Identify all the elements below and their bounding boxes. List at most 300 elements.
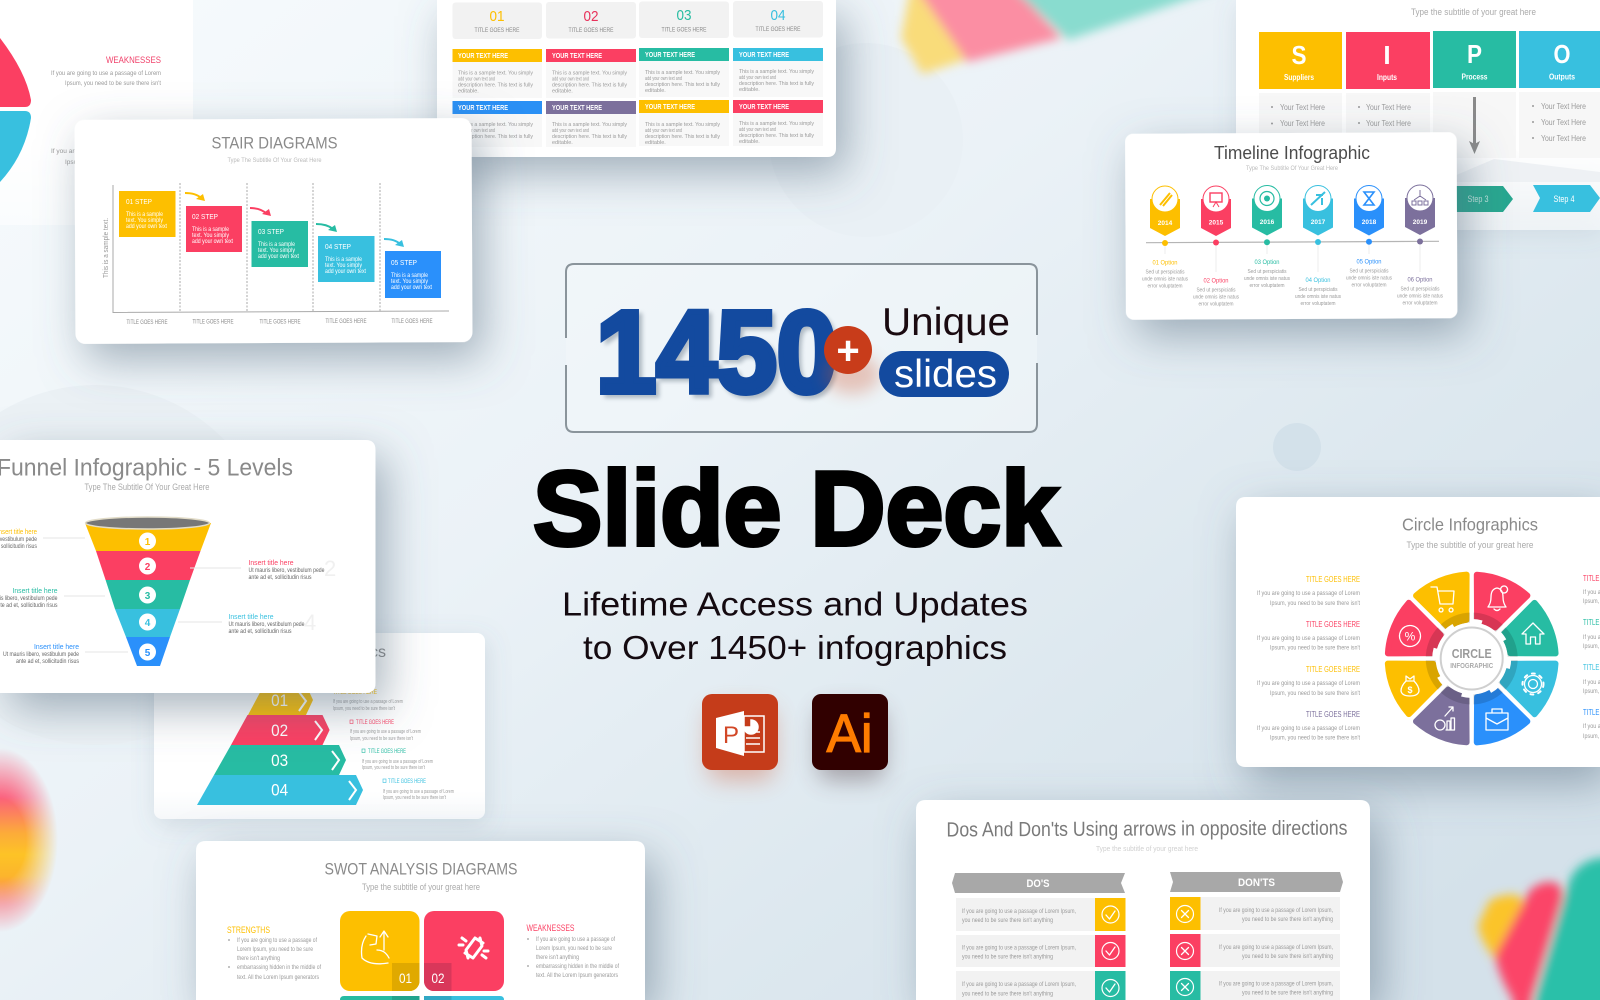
pyramid text blocks: TITLE GOES HERE	[388, 779, 426, 785]
timeline labels: unde omnis iste natus	[1346, 276, 1392, 282]
SIPOC tiles: P	[1467, 39, 1482, 69]
pin 2018: 2018	[1362, 219, 1377, 226]
icon: cart	[1431, 587, 1454, 612]
table body text: editable.	[739, 139, 760, 145]
circle left text: TITLE GOES HERE	[1306, 620, 1360, 629]
table body text: editable.	[458, 88, 479, 94]
table header bars: YOUR TEXT HERE	[645, 104, 695, 111]
circle subtitle: Type the subtitle of your great here	[1406, 540, 1534, 550]
icon: briefcase	[1486, 709, 1508, 730]
table body text: editable.	[645, 140, 666, 146]
pyramid layer 4	[197, 775, 363, 805]
funnel connectors	[43, 538, 241, 652]
decorative arc: left	[0, 385, 275, 745]
don't row 1: If you are going to use a passage of Lorem Ipsum,	[1219, 907, 1333, 914]
numbered title boxes: TITLE GOES HERE	[474, 28, 520, 34]
table header bars: YOUR TEXT HERE	[552, 105, 602, 112]
funnel label 3: Insert title here	[12, 586, 58, 595]
pyramid layer 3	[214, 745, 346, 775]
funnel label 5: ante ad et, sollicitudin risus	[16, 658, 80, 665]
SIPOC bullet text: Your Text Here	[1366, 102, 1411, 112]
step 1: text. You simply	[126, 218, 163, 224]
arrow: process down	[1469, 97, 1480, 154]
timeline labels	[1142, 258, 1443, 308]
timeline labels: error voluptatem	[1300, 301, 1336, 307]
strengths text: embarrassing hidden in the middle of	[237, 964, 321, 971]
SIPOC bullet text: Your Text Here	[1541, 101, 1586, 111]
wedge under SIPOC columns	[1440, 159, 1600, 182]
SWOT tile: strengths	[340, 911, 420, 991]
panel: timeline infographic	[1125, 132, 1457, 320]
timeline labels: error voluptatem	[1402, 300, 1438, 306]
icon: percent badge: %	[1405, 630, 1416, 644]
don't row 3	[1170, 971, 1340, 1000]
table body text: add your own text and	[552, 76, 589, 82]
pyramid text blocks: Ipsum, you need to be sure there isn't	[333, 706, 395, 712]
don't row 2	[1170, 934, 1340, 967]
circle left text: If you are going to use a passage of Lorem	[1257, 680, 1360, 687]
pin 2019	[1405, 185, 1435, 244]
weaknesses text: there isn't anything	[536, 954, 579, 961]
timeline labels: unde omnis iste natus	[1193, 294, 1239, 300]
subheading	[562, 586, 1028, 666]
weaknesses text: Lorem Ipsum, you need to be sure	[536, 945, 612, 952]
table header bars: YOUR TEXT HERE	[739, 52, 789, 59]
pyramid text blocks: If you are going to use a passage of Lorem	[362, 759, 433, 765]
table header bars: YOUR TEXT HERE	[458, 105, 508, 112]
stair axes	[113, 183, 449, 312]
table body text: add your own text and	[458, 128, 495, 134]
funnel graphic: 3	[145, 591, 151, 602]
y-axis label: This is a sample text.	[103, 218, 110, 278]
circle title: Circle Infographics	[1402, 514, 1538, 534]
pin 2016: 2016	[1260, 219, 1275, 226]
numbered title boxes: 01	[490, 8, 504, 25]
panel: funnel infographic	[0, 440, 376, 693]
pyramid text blocks: TITLE GOES HERE	[333, 690, 377, 696]
x-axis labels: TITLE GOES HERE	[192, 318, 234, 326]
panel: weaknesses slide fragment	[0, 0, 193, 225]
circle left text: Ipsum, you need to be sure there isn't	[1270, 644, 1360, 652]
x-axis labels: TITLE GOES HERE	[126, 319, 168, 326]
numbered title boxes: 03	[676, 7, 692, 24]
SIPOC bullet text: Your Text Here	[1366, 118, 1411, 128]
table header bars	[452, 48, 823, 114]
table header bars: YOUR TEXT HERE	[645, 52, 695, 59]
funnel label 2: Ut mauris libero, vestibulum pede	[248, 567, 325, 574]
table body text: This is a sample text. You simply	[739, 121, 814, 127]
step 2: text. You simply	[192, 233, 229, 239]
weaknesses text: WEAKNESSES	[526, 923, 574, 933]
timeline labels: 03 Option	[1254, 259, 1280, 266]
pyramid text blocks: If you are going to use a passage of Lorem	[333, 699, 403, 705]
SIPOC tiles: Suppliers	[1284, 73, 1314, 82]
funnel graphic	[85, 517, 211, 666]
SIPOC column backgrounds	[1259, 92, 1600, 158]
step 3	[252, 221, 308, 267]
subheading: Lifetime Access and Updates	[562, 586, 1028, 622]
pin 2014: 2014	[1158, 220, 1173, 227]
SIPOC tiles: Process	[1462, 72, 1488, 82]
numbered title boxes: 02	[584, 8, 598, 25]
pie chart fragment	[0, 38, 31, 182]
pyramid text blocks: Ipsum, you need to be sure there isn't	[383, 795, 446, 801]
step 2: 02 STEP	[192, 212, 218, 221]
table header bars: YOUR TEXT HERE	[739, 104, 789, 111]
step 5: add your own text	[391, 285, 432, 291]
main heading: Slide Deck	[533, 450, 1060, 568]
text: weaknesses body: If you are going to use a passage of Lorem	[51, 70, 161, 77]
pyramid layer 2	[231, 715, 330, 745]
circle left text: Ipsum, you need to be sure there isn't	[1270, 690, 1360, 697]
table body text: add your own text and	[645, 128, 682, 134]
SIPOC bullet text	[1271, 101, 1586, 143]
stair title: STAIR DIAGRAMS	[212, 134, 338, 152]
timeline labels: 04 Option	[1306, 277, 1331, 284]
timeline labels: unde omnis iste natus	[1397, 294, 1443, 300]
weaknesses text: text. All the Lorem Ipsum generators	[536, 972, 619, 979]
funnel label 3	[0, 586, 58, 609]
numbered title boxes: TITLE GOES HERE	[756, 27, 800, 33]
timeline labels: error voluptatem	[1148, 284, 1183, 290]
funnel graphic: 1	[145, 537, 151, 548]
table body text: description here. This text is fully	[552, 134, 627, 140]
strengths text	[227, 925, 321, 981]
circle left text: Ipsum, you need to be sure there isn't	[1270, 600, 1360, 607]
text: unique: Unique	[882, 301, 1010, 344]
number shadow: 1450	[600, 290, 840, 420]
table body text: This is a sample text. You simply	[458, 70, 533, 76]
text: weaknesses body: If you are	[51, 148, 78, 155]
timeline labels: 01 Option	[1152, 260, 1178, 266]
SIPOC bullet text: Your Text Here	[1280, 118, 1325, 128]
decorative circle: top center	[769, 43, 963, 237]
step 4: This is a sample	[325, 257, 363, 263]
step 5: 05 STEP	[391, 258, 417, 267]
SWOT tile: strengths: 01	[399, 970, 412, 986]
funnel graphic: 5	[145, 648, 151, 659]
step 2: This is a sample	[192, 227, 230, 233]
step 3: text. You simply	[258, 248, 295, 254]
icon: PowerPoint: P	[723, 722, 739, 749]
table body text: add your own text and	[458, 76, 495, 82]
banner: do's: DO'S	[1026, 878, 1050, 890]
do row 1: If you are going to use a passage of Lorem Ipsum,	[962, 908, 1076, 915]
strengths text: Lorem Ipsum, you need to be sure	[237, 946, 313, 953]
pyramid title: Pyramid Infographics	[236, 644, 386, 661]
funnel label 2: 2	[324, 556, 336, 581]
pyramid text blocks: TITLE GOES HERE	[368, 749, 406, 755]
timeline labels: Sed ut perspiciatis	[1146, 270, 1185, 276]
step 4	[318, 236, 374, 282]
icon: growth chart	[1435, 707, 1454, 730]
step 1: 01 STEP	[126, 197, 152, 206]
table body text: editable.	[552, 88, 573, 94]
timeline labels: Sed ut perspiciatis	[1298, 287, 1338, 293]
table body text: This is a sample text. You simply	[458, 122, 533, 128]
blurred shape: left	[0, 750, 56, 930]
timeline connectors	[1165, 243, 1420, 272]
banner: don'ts: DON'TS	[1238, 877, 1275, 889]
timeline labels: 05 Option	[1356, 258, 1382, 266]
don't row 3: you need to be sure there isn't anything	[1242, 990, 1333, 996]
step 2: add your own text	[192, 239, 233, 245]
timeline subtitle: Type The Subtitle Of Your Great Here	[1246, 166, 1339, 172]
funnel label 2: ante ad et, sollicitudin risus	[248, 574, 312, 581]
panel: circle infographics	[1236, 497, 1600, 767]
pin 2019: 2019	[1413, 219, 1428, 226]
circle right text	[1583, 574, 1600, 740]
strengths text: there isn't anything	[237, 955, 280, 962]
blurred shapes: bottom right	[1448, 828, 1600, 1000]
funnel graphic: 2	[145, 562, 151, 573]
table body text: This is a sample text. You simply	[645, 122, 720, 128]
step 3: 03 STEP	[258, 227, 284, 236]
stair arrows	[185, 193, 404, 247]
do row 3	[956, 971, 1126, 1000]
strengths text: STRENGTHS	[227, 925, 270, 935]
pyramid layer 1	[248, 685, 313, 715]
decorative circle: small right	[1273, 423, 1321, 471]
blurred shapes: top center	[901, 0, 1245, 74]
table row bodies	[452, 61, 823, 147]
SWOT subtitle: Type the subtitle of your great here	[362, 882, 480, 892]
pyramid layer 1: 01	[271, 691, 288, 710]
do row 2: If you are going to use a passage of Lorem Ipsum,	[962, 944, 1076, 952]
badge: 1450+ unique slides	[566, 264, 1037, 432]
SIPOC tiles: Outputs	[1549, 72, 1575, 82]
funnel label 4: ante ad et, sollicitudin risus	[228, 628, 292, 635]
icon: Illustrator	[812, 694, 888, 780]
text: weaknesses body: Ipsum	[65, 159, 83, 166]
SIPOC tiles	[1259, 31, 1600, 89]
table body text: description here. This text is fully	[739, 133, 814, 139]
funnel title: Funnel Infographic - 5 Levels	[0, 454, 293, 482]
timeline labels: 06 Option	[1408, 276, 1433, 284]
step 2	[186, 206, 242, 252]
step 3 arrow	[1440, 186, 1513, 212]
SWOT tile: weaknesses: 02	[432, 970, 445, 986]
icon: percent badge	[1400, 626, 1420, 646]
pin 2017	[1303, 186, 1333, 245]
circle left text: TITLE GOES HERE	[1306, 710, 1360, 719]
funnel label 5: Ut mauris libero, vestibulum pede	[3, 651, 79, 658]
timeline labels: Sed ut perspiciatis	[1196, 288, 1236, 294]
pin 2015	[1201, 186, 1231, 246]
step 3: This is a sample	[258, 242, 296, 248]
pyramid layer 4: 04	[271, 780, 288, 800]
table body text: editable.	[552, 140, 573, 146]
SWOT title: SWOT ANALYSIS DIAGRAMS	[324, 860, 518, 878]
numbered title boxes: TITLE GOES HERE	[568, 28, 614, 34]
icon: gear	[1522, 674, 1544, 694]
dos subtitle: Type the subtitle of your great here	[1096, 846, 1198, 853]
panel: dos and don'ts	[916, 800, 1370, 1000]
circle left text: If you are going to use a passage of Lorem	[1257, 590, 1360, 597]
table body text: This is a sample text. You simply	[645, 70, 720, 76]
text: weaknesses body	[51, 70, 161, 166]
don't row 3: If you are going to use a passage of Lorem Ipsum,	[1219, 980, 1333, 988]
panel: table slide	[437, 0, 836, 157]
table body text: description here. This text is fully	[645, 134, 720, 140]
pill: slides: slides	[894, 353, 997, 396]
table body text: description here. This text is fully	[739, 81, 814, 87]
weaknesses text: embarrassing hidden in the middle of	[536, 963, 619, 970]
table body text: editable.	[739, 87, 760, 93]
timeline labels: unde omnis iste natus	[1295, 294, 1341, 300]
funnel label 4: Ut mauris libero, vestibulum pede	[228, 621, 305, 628]
funnel label 4: 4	[304, 610, 316, 635]
step 1	[119, 191, 176, 237]
timeline labels: error voluptatem	[1352, 282, 1387, 288]
do row 3: you need to be sure there isn't anything	[962, 990, 1053, 998]
numbered title boxes: TITLE GOES HERE	[662, 28, 706, 34]
wheel center label: INFOGRAPHIC	[1450, 663, 1493, 670]
funnel label 4: Insert title here	[228, 612, 274, 621]
SIPOC bullet text: Your Text Here	[1541, 133, 1586, 143]
SIPOC tiles: Inputs	[1377, 73, 1397, 82]
SWOT tile: opportunities	[340, 996, 420, 1000]
funnel graphic: 4	[145, 618, 151, 629]
table body text	[458, 69, 814, 146]
step 4 arrow: Step 4	[1554, 194, 1574, 204]
circle left text: TITLE GOES HERE	[1306, 575, 1360, 584]
step 3 arrow: Step 3	[1468, 194, 1488, 204]
step 5: text. You simply	[391, 279, 428, 285]
step 1: add your own text	[126, 224, 167, 230]
pin 2018	[1354, 186, 1384, 245]
timeline labels: error voluptatem	[1250, 283, 1285, 289]
step 4: add your own text	[325, 269, 366, 275]
icon: house	[1522, 623, 1544, 644]
table body text: description here. This text is fully	[645, 82, 720, 88]
panel: pyramid slide	[154, 633, 485, 819]
table body text: description here. This text is fully	[552, 82, 627, 88]
strengths text: If you are going to use a passage of	[237, 937, 317, 944]
SIPOC tiles: I	[1383, 40, 1391, 70]
step 4: 04 STEP	[325, 242, 351, 251]
numbered title boxes: 04	[770, 7, 786, 24]
icon: money bag	[1401, 676, 1419, 696]
plus badge	[824, 326, 872, 374]
timeline labels: Sed ut perspiciatis	[1248, 269, 1287, 275]
pyramid text blocks: TITLE GOES HERE	[356, 720, 394, 726]
do row 1: you need to be sure there isn't anything	[962, 917, 1053, 924]
stair subtitle: Type The Subtitle Of Your Great Here	[228, 157, 322, 164]
icon: Illustrator: Ai	[826, 704, 872, 764]
step 5: This is a sample	[391, 273, 429, 279]
banner: do's	[952, 873, 1125, 893]
pyramid text blocks: Ipsum, you need to be sure there isn't	[362, 765, 425, 771]
SIPOC bullet text: Your Text Here	[1280, 102, 1325, 112]
table body text: add your own text and	[552, 128, 589, 134]
table header bars: YOUR TEXT HERE	[458, 53, 508, 60]
panel: SIPOC slide	[1236, 0, 1600, 230]
timeline line	[1146, 241, 1439, 243]
badge frame	[566, 264, 1037, 432]
table body text: This is a sample text. You simply	[552, 122, 627, 128]
pin 2017: 2017	[1311, 219, 1326, 226]
SIPOC tiles: S	[1292, 40, 1306, 70]
pin 2015: 2015	[1209, 220, 1224, 226]
icon: bell	[1488, 586, 1508, 610]
don't row 2: If you are going to use a passage of Lorem Ipsum,	[1219, 944, 1333, 951]
table body text: This is a sample text. You simply	[739, 69, 814, 75]
text: weaknesses body: Ipsum, you need to be sure there isn't	[65, 80, 161, 87]
step 3: add your own text	[258, 254, 299, 260]
table body text: description here. This text is fully	[458, 134, 533, 140]
numbered title boxes	[452, 1, 823, 39]
timeline labels: unde omnis iste natus	[1244, 276, 1290, 282]
funnel label 2	[248, 556, 336, 581]
dos title: Dos And Don'ts Using arrows in opposite directions	[946, 817, 1348, 841]
SIPOC subtitle: Type the subtitle of your great here	[1411, 7, 1536, 17]
x-axis labels: TITLE GOES HERE	[392, 318, 433, 325]
panel: stair diagrams	[74, 118, 473, 344]
timeline labels: Sed ut perspiciatis	[1400, 286, 1440, 292]
pyramid text blocks: Ipsum, you need to be sure there isn't	[350, 736, 413, 742]
table body text: add your own text and	[739, 127, 776, 133]
don't row 2: you need to be sure there isn't anything	[1242, 953, 1333, 960]
plus badge: +	[836, 329, 860, 373]
icon: money bag: $	[1407, 685, 1413, 695]
table body text: add your own text and	[739, 75, 776, 81]
number: 1450: 1450	[596, 287, 837, 417]
funnel label 5: Insert title here	[34, 642, 79, 651]
don't row 1: you need to be sure there isn't anything	[1242, 916, 1333, 923]
circle left text: If you are going to use a passage of Lorem	[1257, 725, 1360, 732]
funnel subtitle: Type The Subtitle Of Your Great Here	[84, 482, 210, 492]
timeline title: Timeline Infographic	[1214, 142, 1370, 163]
panel: SWOT analysis	[196, 841, 645, 1000]
table body text: editable.	[645, 88, 666, 94]
SIPOC tiles: O	[1554, 39, 1570, 69]
timeline labels: 02 Option	[1204, 278, 1229, 284]
funnel label 4	[228, 610, 316, 635]
do row 2	[956, 935, 1126, 967]
icon: PowerPoint	[702, 694, 778, 780]
table body text: add your own text and	[645, 76, 682, 82]
subheading: to Over 1450+ infographics	[583, 629, 1007, 666]
funnel label 5	[3, 642, 80, 665]
step 5	[385, 251, 441, 298]
SIPOC bullet text: Your Text Here	[1541, 117, 1586, 127]
timeline labels: error voluptatem	[1198, 302, 1234, 308]
banner: don'ts	[1170, 872, 1343, 892]
pyramid text blocks	[333, 690, 454, 801]
wheel center label: CIRCLE	[1452, 647, 1492, 661]
heading: weaknesses: WEAKNESSES	[106, 55, 161, 65]
timeline labels: unde omnis iste natus	[1142, 276, 1188, 282]
SWOT tile: threats	[424, 996, 504, 1000]
wheel center label	[1450, 647, 1493, 670]
pyramid layer 3: 03	[271, 751, 288, 770]
funnel label 2: Insert title here	[248, 558, 294, 567]
x-axis labels: TITLE GOES HERE	[260, 318, 301, 326]
do row 2: you need to be sure there isn't anything	[962, 954, 1053, 960]
step 4: text. You simply	[325, 263, 362, 269]
wheel segments	[1373, 560, 1570, 757]
table header bars: YOUR TEXT HERE	[552, 53, 602, 60]
pyramid text blocks: If you are going to use a passage of Lorem	[350, 729, 421, 735]
don't row 1	[1170, 897, 1340, 930]
do row 3: If you are going to use a passage of Lorem Ipsum,	[962, 981, 1076, 988]
timeline labels: Sed ut perspiciatis	[1350, 268, 1389, 274]
circle left text	[1257, 575, 1360, 742]
pin 2016	[1252, 186, 1282, 245]
step 1: This is a sample	[126, 212, 164, 218]
pin 2014	[1150, 186, 1180, 246]
